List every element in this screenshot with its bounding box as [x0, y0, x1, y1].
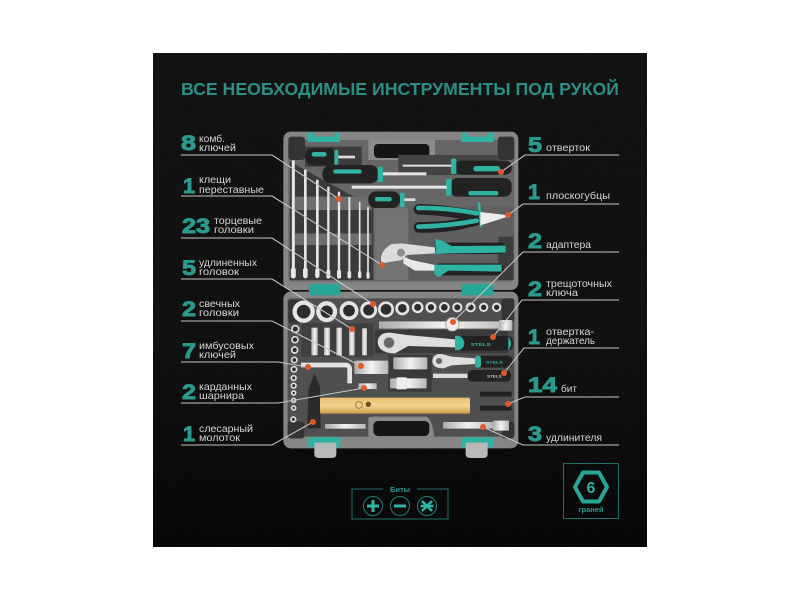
label: 2 spark plug sockets: 2: [182, 298, 196, 321]
six-sided socket badge: граней: [578, 505, 604, 514]
label: 1 screwdriver holder: [528, 326, 595, 349]
label: 5 deep sockets: [182, 257, 258, 280]
label: 2 adapters: 2: [528, 230, 542, 253]
extensions: [325, 421, 509, 431]
hex keys: [301, 365, 350, 383]
14 bits: [480, 392, 512, 411]
label: 2 spark plug sockets: [182, 298, 241, 321]
label: 2 spark plug sockets: головки: [199, 307, 239, 319]
label: 1 hammer: молоток: [199, 432, 240, 444]
label: 8 wrenches: [181, 132, 236, 155]
label: 1 hammer: 1: [183, 423, 195, 446]
label: 2 ratchets: 2: [528, 278, 542, 301]
label: 2 adapters: [528, 230, 591, 253]
small sockets: left column: [291, 326, 299, 422]
pliers: [418, 203, 511, 227]
label: 5 screwdrivers: 5: [528, 134, 542, 157]
8 combination wrenches: [293, 162, 368, 277]
universal joints: [358, 377, 427, 389]
label: 1 adjustable pliers: клещи: [199, 174, 231, 186]
label: 1 adjustable pliers: переставные: [199, 184, 264, 196]
label: 2 universal joints: [182, 381, 253, 404]
background panel: [153, 53, 647, 547]
ratchets: [378, 333, 513, 368]
label: 2 spark plug sockets: свечных: [199, 298, 241, 310]
label: 14 bits: [528, 374, 577, 397]
callout lines: left: [181, 155, 382, 445]
water pump pliers: [381, 239, 506, 277]
hammer: [307, 373, 470, 428]
label: 2 ratchets: [528, 278, 613, 301]
label: 5 deep sockets: удлиненных: [199, 257, 258, 269]
label: 2 adapters: адаптера: [546, 239, 591, 251]
deep sockets: [311, 328, 367, 355]
label: 1 hammer: слесарный: [199, 423, 253, 435]
bits legend: [352, 485, 448, 519]
screwdriver holder: [433, 370, 511, 382]
label: 7 hex keys: ключей: [199, 349, 236, 361]
label: 8 wrenches: 8: [181, 132, 196, 155]
label: 23 sockets: 23: [182, 215, 210, 238]
23 sockets: top row: [295, 303, 500, 321]
label: 23 sockets: головки: [214, 224, 254, 236]
label: 3 extensions: удлинителя: [546, 432, 602, 444]
ratchets: STELS: [471, 342, 491, 348]
six-sided socket badge: 6: [587, 480, 596, 497]
icon: torx bit: [418, 496, 436, 516]
label: 1 hammer: [183, 423, 253, 446]
label: 1 screwdriver holder: держатель: [546, 335, 595, 347]
six-sided socket badge: [564, 464, 618, 518]
label: 2 ratchets: трещоточных: [546, 278, 613, 290]
latches: lid: [308, 133, 494, 295]
label: 1 adjustable pliers: [183, 174, 264, 198]
title: ВСЕ НЕОБХОДИМЫЕ ИНСТРУМЕНТЫ ПОД РУКОЙ: [181, 78, 619, 99]
latches: tray: [308, 290, 494, 458]
label: 1 pliers: плоскогубцы: [546, 190, 610, 202]
icon: slotted bit: [390, 496, 410, 516]
label: 5 deep sockets: 5: [182, 257, 196, 280]
label: 1 screwdriver holder: 1: [528, 326, 540, 349]
ratchets: STELS: [486, 361, 503, 365]
label: 1 screwdriver holder: отвертка-: [546, 326, 595, 338]
label: 8 wrenches: комб.: [199, 133, 225, 145]
label: 7 hex keys: [182, 340, 255, 363]
label: 5 deep sockets: головок: [199, 266, 239, 278]
case: upper lid with hand tools: [283, 132, 518, 295]
label: 14 bits: бит: [561, 383, 577, 395]
screwdriver holder: STELS: [487, 375, 503, 379]
label: 23 sockets: [182, 215, 262, 238]
callout lines: right: [453, 155, 619, 445]
5 screwdrivers: [305, 148, 512, 208]
label: 2 universal joints: карданных: [199, 381, 253, 393]
case: lower tray with sockets: [283, 290, 518, 458]
label: 3 extensions: [528, 423, 602, 446]
label: 5 screwdrivers: [528, 134, 590, 157]
label: 7 hex keys: 7: [182, 340, 196, 363]
label: 2 ratchets: ключа: [546, 287, 578, 299]
label: 8 wrenches: ключей: [199, 142, 236, 154]
label: 2 universal joints: 2: [182, 381, 196, 404]
label: 23 sockets: торцевые: [214, 215, 262, 227]
label: 1 pliers: 1: [528, 181, 540, 204]
spark plug socket and extension bar: [354, 318, 512, 374]
label: 3 extensions: 3: [528, 423, 542, 446]
label: 1 adjustable pliers: 1: [183, 175, 195, 198]
label: 5 screwdrivers: отверток: [546, 142, 590, 154]
callout dots: [305, 169, 511, 430]
icon: phillips bit: [364, 496, 382, 516]
label: 14 bits: 14: [528, 374, 557, 397]
label: 7 hex keys: имбусовых: [199, 340, 255, 352]
bits legend: Биты: [390, 485, 410, 494]
label: 2 universal joints: шарнира: [199, 390, 244, 402]
label: 1 pliers: [528, 181, 610, 204]
